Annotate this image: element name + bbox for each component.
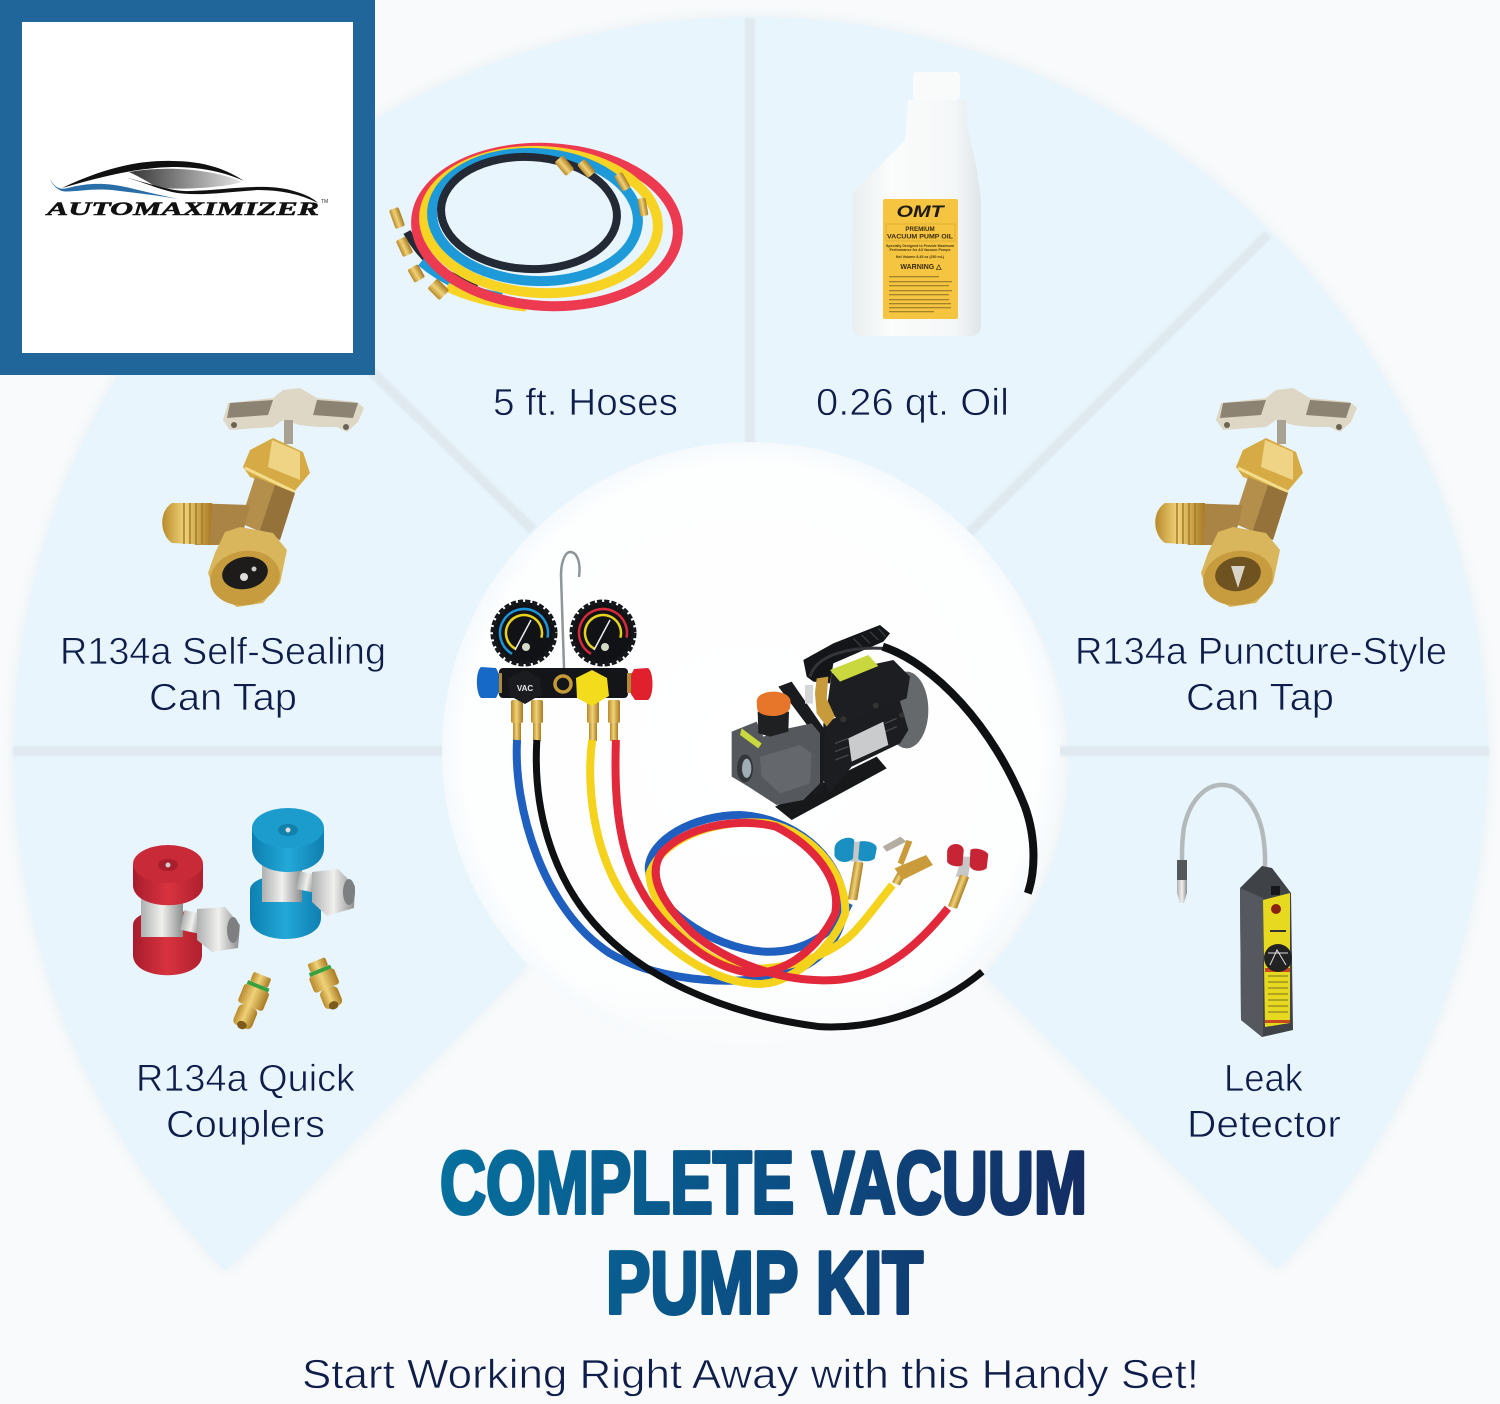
label: R134a Puncture-Style Can Tap: R134a Puncture-Style xyxy=(1075,631,1447,673)
panel separators xyxy=(13,18,1489,751)
hose connectors xyxy=(511,700,620,741)
oil label: OMT xyxy=(896,202,945,221)
oil label: PREMIUM xyxy=(905,226,935,233)
label: R134a Quick Couplers xyxy=(136,1058,356,1146)
title xyxy=(440,1133,1087,1332)
red coupler xyxy=(133,845,240,975)
image: leak detector xyxy=(1177,785,1293,1037)
subtitle: Start Working Right Away with this Handy Set! xyxy=(302,1351,1199,1397)
label: R134a Puncture-Style Can Tap xyxy=(1075,631,1447,719)
gauge: low side xyxy=(491,600,557,666)
label: R134a Puncture-Style Can Tap: Can Tap xyxy=(1186,677,1334,719)
centre circle xyxy=(442,442,1060,1060)
brass adapters xyxy=(228,956,348,1034)
logo: trademark: TM xyxy=(321,199,328,205)
label: 0.26 qt. Oil: 0.26 qt. Oil xyxy=(816,382,1009,424)
label: R134a Quick Couplers: R134a Quick xyxy=(136,1058,356,1100)
logo: wordmark: AUTOMAXIMIZER xyxy=(45,199,319,220)
manifold body: VAC xyxy=(517,684,533,693)
hose: black upper xyxy=(883,647,1033,893)
label: Leak Detector xyxy=(1187,1058,1341,1146)
oil label: Specially Designed to Provide Maximum xyxy=(886,244,954,248)
hanger hook xyxy=(561,552,580,668)
hose: red xyxy=(616,740,948,980)
image: puncture-style can tap xyxy=(1155,388,1357,611)
image: quick couplers xyxy=(133,808,355,1034)
oil label: Net Volume 8.45 oz (250 mL) xyxy=(896,255,945,259)
label: R134a Quick Couplers: Couplers xyxy=(166,1104,325,1146)
gauge: high side xyxy=(570,600,636,666)
manifold body xyxy=(477,667,652,706)
label: Leak Detector: Detector xyxy=(1187,1104,1341,1146)
label: R134a Self-Sealing Can Tap: R134a Self-Sealing xyxy=(60,631,386,673)
label: 5 ft. Hoses: 5 ft. Hoses xyxy=(493,382,678,424)
logo: car swoosh xyxy=(50,161,318,203)
blue coupler xyxy=(250,808,355,939)
hose end couplers xyxy=(834,837,988,909)
hose: blue xyxy=(517,740,849,981)
hoses in shared coordinates xyxy=(517,647,1033,1027)
title: PUMP KIT xyxy=(606,1233,923,1332)
image: coiled hoses xyxy=(389,141,682,313)
oil label xyxy=(883,199,958,319)
label: R134a Self-Sealing Can Tap: Can Tap xyxy=(149,677,297,719)
image: oil bottle xyxy=(852,72,981,336)
vacuum pump xyxy=(732,625,928,820)
oil label: Performance for All Vacuum Pumps xyxy=(890,248,950,252)
hose: black lower xyxy=(536,740,982,1027)
logo frame xyxy=(0,0,375,375)
label: R134a Self-Sealing Can Tap xyxy=(60,631,386,719)
title: COMPLETE VACUUM xyxy=(440,1133,1087,1232)
oil label: VACUUM PUMP OIL xyxy=(887,234,953,240)
centre lower fade xyxy=(440,980,1060,1065)
image: self-sealing can tap xyxy=(162,388,364,611)
hose: yellow xyxy=(590,740,893,984)
oil label: WARNING △ xyxy=(900,264,942,271)
label: Leak Detector: Leak xyxy=(1224,1058,1304,1100)
image: manifold gauge set and vacuum pump xyxy=(477,552,1033,1027)
